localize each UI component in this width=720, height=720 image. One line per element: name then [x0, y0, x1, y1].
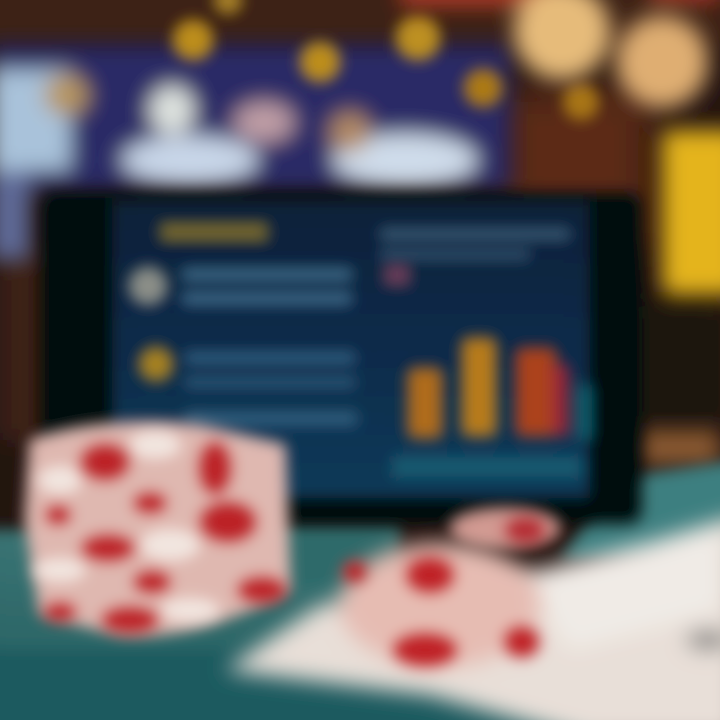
icon: scattered red poker chips — [340, 508, 560, 667]
panel: phone with dashboard — [42, 192, 642, 524]
phone screen — [112, 200, 590, 498]
text block: second list item — [185, 352, 357, 425]
icon: small red marker — [384, 264, 410, 286]
heading: dashboard title — [160, 222, 268, 242]
panel: green table — [0, 460, 720, 720]
panel: purple and white banners — [0, 45, 510, 260]
icon: yellow bokeh lights — [173, 0, 599, 120]
phone body — [42, 192, 642, 524]
icon: large stack of red poker chips — [25, 422, 290, 635]
icon: glowing yellow panel — [662, 130, 720, 295]
heading: chart title — [380, 228, 570, 259]
icon: top list badge — [129, 267, 167, 305]
bar chart — [392, 338, 592, 478]
icon: yellow list badge — [139, 347, 173, 381]
text block: first list item — [182, 268, 352, 305]
icon: paper lanterns — [400, 0, 720, 108]
panel: white paper sheets — [225, 515, 720, 720]
